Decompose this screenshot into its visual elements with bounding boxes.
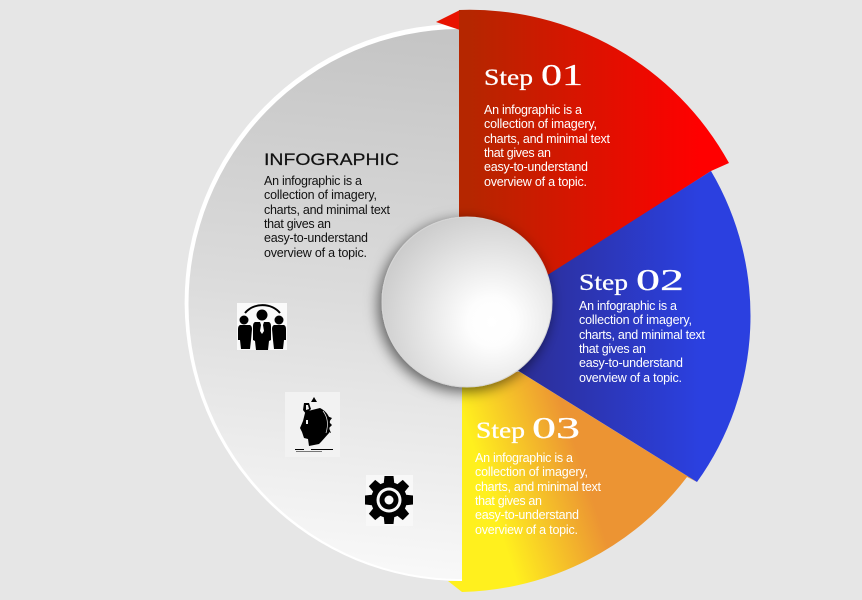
panel: step 03 orange segment (448, 372, 697, 592)
text block: step 01: overview of a topic. (484, 175, 587, 189)
text block: step 02: that gives an (579, 342, 646, 356)
heading: step 03: 03 (532, 410, 580, 445)
icon: head with gear (285, 392, 340, 457)
text block: infographic (264, 174, 391, 260)
heading: step 03: Step (476, 418, 525, 443)
text block: step 01: An infographic is a (484, 103, 582, 117)
text block: step 02: overview of a topic. (579, 371, 682, 385)
text block: infographic: An infographic is a (264, 174, 362, 188)
heading: step 01: Step (484, 65, 533, 90)
text block: step 02: An infographic is a (579, 299, 677, 313)
text block: step 03: overview of a topic. (475, 523, 578, 537)
text block: step 02: collection of imagery, (579, 313, 692, 327)
text block: infographic: collection of imagery, (264, 188, 377, 202)
text block: step 01: that gives an (484, 146, 551, 160)
heading: step 02: 02 (636, 262, 684, 297)
heading: step 02 (579, 262, 684, 297)
icon: team of people (237, 303, 287, 350)
text block: step 03: charts, and minimal text (475, 480, 602, 494)
text block: infographic: easy-to-understand (264, 231, 368, 245)
text block: step 02: charts, and minimal text (579, 328, 706, 342)
text block: step 01: easy-to-understand (484, 160, 588, 174)
text block: step 03: An infographic is a (475, 451, 573, 465)
text block: step 02: easy-to-understand (579, 356, 683, 370)
text block: step 03 (475, 451, 602, 537)
text block: step 01: collection of imagery, (484, 117, 597, 131)
text block: step 02 (579, 299, 706, 385)
text block: step 01 (484, 103, 611, 189)
heading: step 01: 01 (541, 57, 583, 92)
panel: gray half disc (185, 24, 462, 581)
heading: step 01 (484, 57, 583, 92)
panel: step 02 blue segment (480, 171, 751, 482)
text block: step 03: that gives an (475, 494, 542, 508)
text block: step 03: collection of imagery, (475, 465, 588, 479)
heading: step 02: Step (579, 270, 628, 295)
heading: infographic: INFOGRAPHIC (264, 150, 399, 169)
panel: step 01 red segment (436, 10, 729, 307)
text block: step 03: easy-to-understand (475, 508, 579, 522)
text block: infographic: charts, and minimal text (264, 203, 391, 217)
heading: step 03 (476, 410, 580, 445)
center circle (382, 217, 552, 387)
icon: gear (365, 475, 413, 526)
text block: step 01: charts, and minimal text (484, 132, 611, 146)
text block: infographic: overview of a topic. (264, 246, 367, 260)
text block: infographic: that gives an (264, 217, 331, 231)
